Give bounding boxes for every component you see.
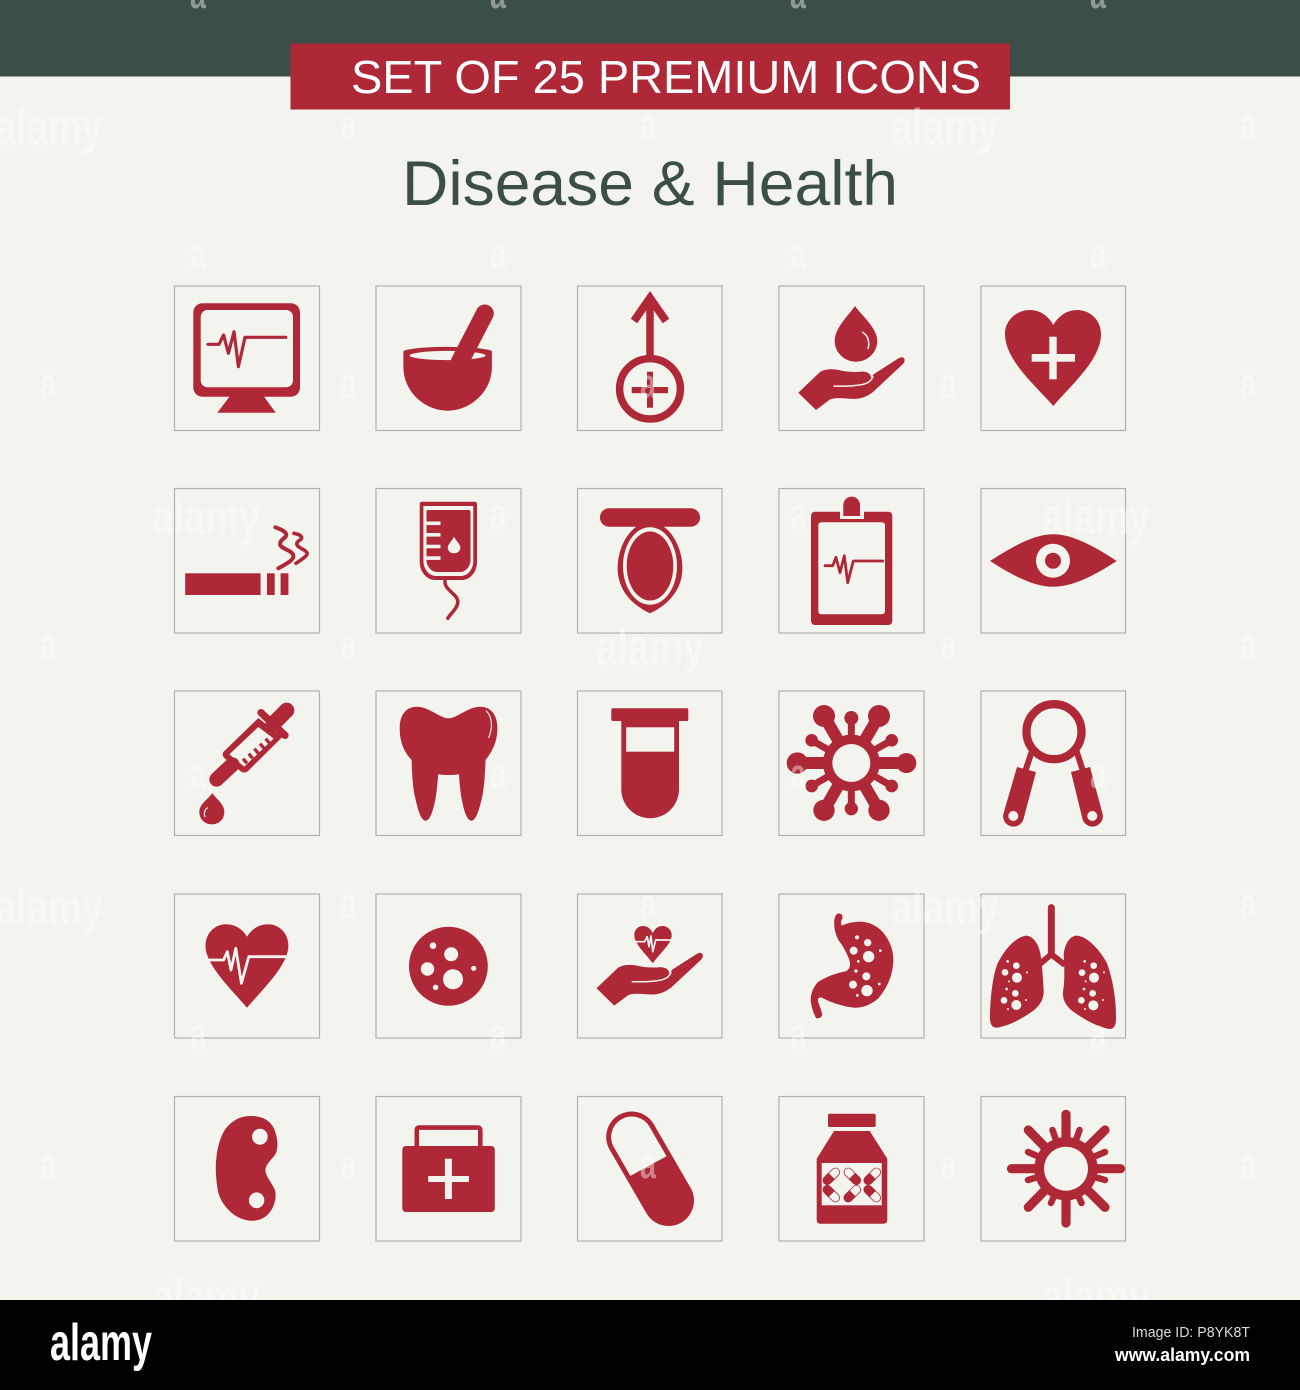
watermarks: a xyxy=(340,880,356,927)
icon: test tube xyxy=(611,708,688,818)
icon: kidney xyxy=(216,1116,277,1221)
watermarks: a xyxy=(190,230,206,277)
icon: stomach xyxy=(811,913,893,1018)
watermarks: a xyxy=(190,1010,206,1057)
panel: virus xyxy=(779,691,924,836)
watermarks: alamy xyxy=(891,99,999,155)
watermarks: a xyxy=(490,490,506,537)
icon: gender symbol xyxy=(620,298,680,419)
watermarks: a xyxy=(340,360,356,407)
panel: male symbol with plus xyxy=(578,286,722,430)
panel: iv bag xyxy=(376,488,521,633)
icon: medicine bottle xyxy=(817,1114,887,1224)
panel: pill bottle xyxy=(779,1096,924,1241)
watermarks: alamy xyxy=(1042,489,1150,545)
icon: hand with blood drop xyxy=(798,306,905,410)
watermarks: a xyxy=(490,230,506,277)
watermarks: a xyxy=(40,620,56,667)
icon: lungs xyxy=(990,908,1116,1029)
panel: eye xyxy=(981,488,1126,633)
watermarks: a xyxy=(790,490,806,537)
watermarks: a xyxy=(940,620,956,667)
icon: clipboard xyxy=(811,497,892,625)
footer bar xyxy=(0,1300,1300,1390)
banner text: SET OF 25 PREMIUM ICONS xyxy=(351,51,981,103)
watermarks: a xyxy=(1090,1010,1106,1057)
watermarks: a xyxy=(1240,100,1256,147)
watermarks: a xyxy=(340,1140,356,1187)
icon: cigarette with smoke xyxy=(185,527,307,595)
watermarks: a xyxy=(490,1010,506,1057)
panel: bacteria cell xyxy=(376,894,521,1038)
watermarks: a xyxy=(340,100,356,147)
panel: heart with plus xyxy=(981,286,1126,430)
watermarks: alamy xyxy=(596,619,704,675)
icon: heart plus xyxy=(1005,310,1101,406)
watermarks: a xyxy=(1090,750,1106,797)
watermarks: a xyxy=(790,230,806,277)
header band xyxy=(0,0,1300,76)
icon: hand grip exerciser xyxy=(1003,704,1103,827)
footer logo: alamy xyxy=(50,1314,152,1372)
panel: kidney xyxy=(174,1096,320,1241)
icon: first aid kit xyxy=(402,1128,495,1212)
icon: hand holding heart xyxy=(596,926,703,1006)
icon: heart pulse xyxy=(206,924,289,1008)
panel: capsule xyxy=(578,1096,722,1241)
icon: mortar xyxy=(403,314,492,411)
icon: capsule pill xyxy=(611,1116,668,1200)
panel: test tube xyxy=(578,691,722,836)
watermarks: alamy xyxy=(1042,1269,1150,1325)
panel: medical kit xyxy=(376,1096,521,1241)
icon: toilet xyxy=(600,508,700,613)
panel: heart with pulse xyxy=(174,894,320,1038)
watermarks: a xyxy=(640,360,656,407)
watermarks: a xyxy=(640,880,656,927)
watermarks: alamy xyxy=(152,1269,260,1325)
watermarks: alamy xyxy=(152,489,260,545)
icon: iv drip bag xyxy=(420,502,477,618)
banner xyxy=(290,44,1010,110)
icon: pipette with drop xyxy=(199,710,287,824)
panel: mortar and pestle xyxy=(376,286,521,430)
watermarks: a xyxy=(640,100,656,147)
watermarks: a xyxy=(40,1140,56,1187)
panel: hand with heart xyxy=(578,894,722,1038)
watermarks: a xyxy=(640,1140,656,1187)
watermarks: a xyxy=(1240,880,1256,927)
footer url: www.alamy.com xyxy=(1114,1345,1250,1365)
watermarks: a xyxy=(940,360,956,407)
panel: dropper xyxy=(174,691,320,836)
panel: cigarette xyxy=(174,488,320,633)
watermarks: a xyxy=(790,1010,806,1057)
watermarks: a xyxy=(1090,230,1106,277)
watermarks: a xyxy=(1240,620,1256,667)
panel: medical chart xyxy=(779,488,924,633)
icon: monitor xyxy=(193,303,300,413)
watermarks: a xyxy=(190,750,206,797)
panel: blood donation xyxy=(779,286,924,430)
panel: oval device xyxy=(578,488,722,633)
icon: eye xyxy=(990,534,1117,587)
title: Disease & Health xyxy=(402,149,898,219)
panel: stomach xyxy=(779,894,924,1038)
watermarks: a xyxy=(1240,1140,1256,1187)
panel: tooth xyxy=(376,691,521,836)
panel: heart monitor xyxy=(174,286,320,430)
watermarks: alamy xyxy=(891,879,999,935)
watermarks: a xyxy=(790,750,806,797)
panel: hand gripper xyxy=(981,691,1126,836)
footer image id: Image ID: P8YK8T xyxy=(1132,1324,1250,1341)
icon: sun xyxy=(1012,1114,1120,1223)
panel: sun xyxy=(981,1096,1126,1241)
watermarks: a xyxy=(490,750,506,797)
watermarks: a xyxy=(940,1140,956,1187)
watermarks: a xyxy=(340,620,356,667)
watermarks: a xyxy=(40,360,56,407)
panel: lungs xyxy=(981,894,1126,1038)
icon: round cell xyxy=(409,927,488,1006)
icon: tooth xyxy=(400,707,497,821)
watermarks: a xyxy=(1240,360,1256,407)
icon: virus xyxy=(787,705,916,821)
